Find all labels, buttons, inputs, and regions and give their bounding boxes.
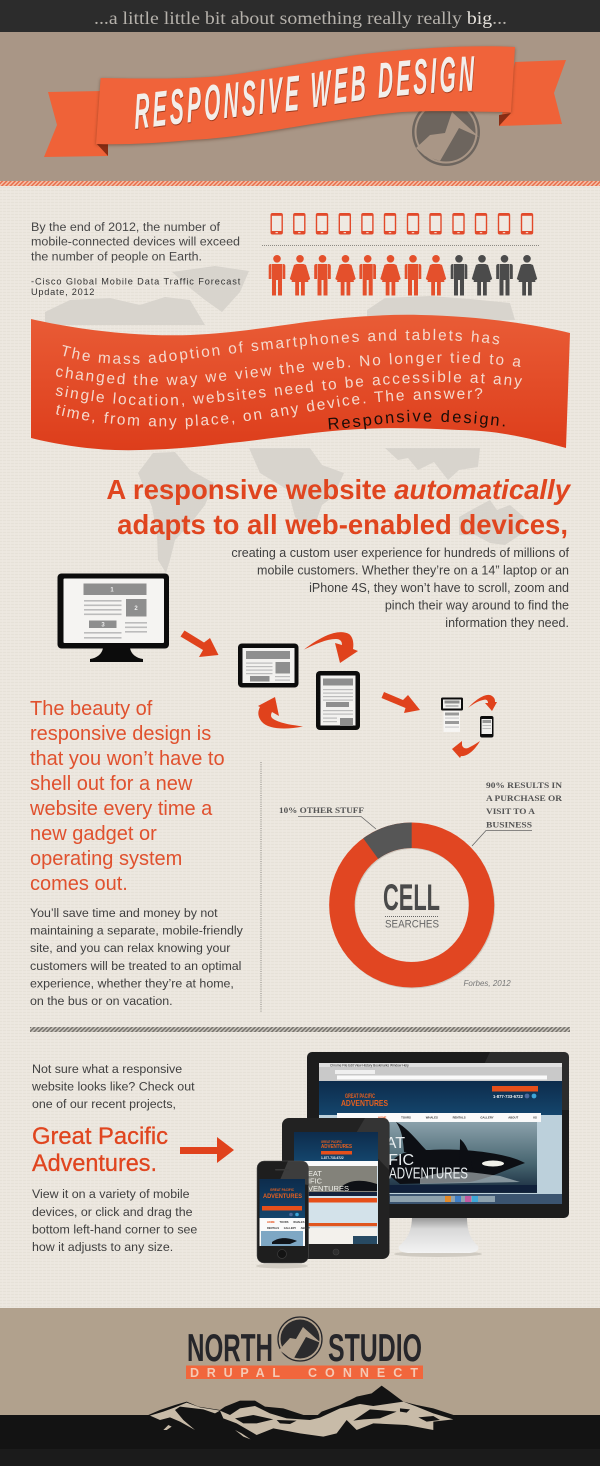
intro paragraph: pinch their way around to find the [385, 598, 569, 612]
banner quote: The mass adoption of smartphones and tablets has [62, 328, 500, 364]
drupal connect tag: DRUPAL [190, 1366, 280, 1380]
website header [319, 1081, 562, 1115]
label: 10% other stuff [279, 805, 376, 829]
banner quote: single location, websites need to be accessible at any [56, 370, 522, 407]
footer band [0, 1308, 600, 1466]
example project text: how it adjusts to any size. [32, 1240, 173, 1254]
donut centre label [383, 877, 440, 930]
example project text: devices, or click and drag the [32, 1205, 193, 1219]
example project text: one of our recent projects, [32, 1097, 176, 1111]
icon: small phone [480, 716, 494, 738]
device mockup: tablet [282, 1118, 390, 1259]
header band [0, 32, 600, 186]
arrow: small curved right [468, 695, 497, 711]
drupal connect tag [186, 1366, 423, 1380]
savings paragraph: site, and you can relax knowing your [30, 941, 230, 955]
website hero whale photo: ADVENTURES [389, 1166, 468, 1182]
device mockup: tablet: GREAT PACIFIC [321, 1139, 342, 1144]
savings paragraph: maintaining a separate, mobile-friendly [30, 924, 244, 938]
savings paragraph: experience, whether they’re at home, [30, 976, 234, 990]
intro paragraph [231, 546, 570, 630]
savings paragraph [30, 906, 244, 1008]
icon: logo circle [278, 1317, 322, 1361]
example project text [31, 1062, 197, 1254]
arrow: curved tablet rotate left [258, 697, 303, 728]
intro paragraph: iPhone 4S, they won’t have to scroll, zoom and [309, 581, 569, 595]
project name: Adventures. [32, 1150, 157, 1177]
device mockup: tablet: IFIC [308, 1176, 323, 1186]
website nav: HOME TOURS WHALES RENTALS GALLERY ABOUT US [378, 1116, 537, 1120]
beauty of responsive design callout: comes out. [30, 873, 128, 895]
arrow: small curved left [452, 741, 480, 758]
arrow: to device mockups [180, 1137, 234, 1163]
donut centre label: CELL [383, 877, 440, 918]
label: 90% results: 90% RESULTS IN [486, 780, 563, 790]
intro paragraph: creating a custom user experience for hundreds of millions of [231, 546, 570, 560]
top bar with tagline [0, 0, 600, 32]
banner quote: changed the way we view the web. No longer tied to a [56, 352, 520, 388]
device mockup: tablet: ADVENTURES [321, 1144, 352, 1150]
beauty of responsive design callout: responsive design is [30, 723, 211, 745]
north studio logo [186, 1317, 423, 1380]
label: 90% results: BUSINESS [486, 820, 532, 830]
icon: desktop monitor wireframe [58, 574, 169, 662]
intro paragraph: information they need. [445, 616, 569, 630]
beauty of responsive design callout: operating system [30, 848, 182, 870]
website hero whale photo: CIFIC [372, 1152, 414, 1169]
label: 90% results: A PURCHASE OR [486, 793, 563, 803]
heading: A responsive website automatically [106, 474, 572, 505]
intro paragraph: mobile customers. Whether they’re on a 14” laptop or an [257, 564, 569, 578]
label: 90% results [472, 780, 563, 846]
banner quote: time, from any place, on any device. The answer? [56, 388, 482, 430]
world map background [45, 266, 524, 573]
north studio logo: NORTH [187, 1327, 273, 1370]
browser chrome [319, 1063, 562, 1081]
icon: small phone layout stack [441, 698, 463, 732]
beauty of responsive design callout: The beauty of [30, 698, 153, 720]
beauty of responsive design callout: new gadget or [30, 823, 157, 845]
banner quote [56, 328, 522, 430]
device mockup: tablet: EAT [308, 1169, 322, 1178]
arrow: tablet to phone [382, 692, 420, 713]
project name: Great Pacific [32, 1123, 168, 1150]
icon: portrait tablet wireframe [316, 671, 360, 730]
icon: desktop monitor wireframe: 1 [110, 588, 114, 594]
example project text: bottom left-hand corner to see [32, 1222, 197, 1236]
arrow: curved tablet rotate right [304, 632, 358, 663]
cisco statistic text: mobile-connected devices will exceed [31, 234, 240, 248]
device mockup: phone: RENTALS GALLERY ABOUT [267, 1226, 310, 1230]
device mockup: tablet: VENTURES [308, 1184, 349, 1193]
cisco statistic text: Update, 2012 [31, 287, 95, 297]
device mockup: desktop [307, 1052, 569, 1257]
drupal connect tag: CONNECT [308, 1366, 418, 1380]
cisco statistic text: By the end of 2012, the number of [31, 220, 221, 234]
website hero whale photo [339, 1122, 537, 1193]
cisco statistic text [31, 220, 241, 297]
example project text: website looks like? Check out [31, 1080, 195, 1094]
tagline: ...a little little bit about something really really big... [94, 8, 507, 28]
savings paragraph: You’ll save time and money by not [30, 906, 218, 920]
icons: row of twelve people [269, 255, 537, 296]
website header: GREAT PACIFIC [345, 1094, 375, 1100]
panel: wavy orange banner [31, 314, 570, 450]
donut centre label: SEARCHES [385, 918, 439, 930]
icon: mountain logo stamp [412, 98, 480, 166]
device mockup: phone [256, 1161, 310, 1268]
icon: desktop monitor wireframe: 2 [134, 606, 138, 612]
label: 90% results: VISIT TO A [486, 806, 536, 816]
icons: row of twelve phones [270, 213, 533, 234]
website hero whale photo: EAT [375, 1135, 405, 1152]
savings paragraph: on the bus or on vacation. [30, 994, 173, 1008]
project name [32, 1123, 168, 1177]
cisco statistic text: the number of people on Earth. [31, 250, 202, 264]
icon: landscape tablet wireframe [238, 644, 298, 688]
device mockup: phone: HOME TOURS WHALES [267, 1220, 305, 1224]
beauty of responsive design callout [29, 698, 225, 895]
beauty of responsive design callout: shell out for a new [30, 773, 193, 795]
ribbon banner [44, 46, 566, 157]
beauty of responsive design callout: website every time a [29, 798, 213, 820]
device mockup: phone: ADVENTURES [263, 1193, 303, 1200]
source: forbes: Forbes, 2012 [464, 979, 511, 988]
arrow: desktop to tablet [180, 630, 218, 657]
browser chrome: Chrome File Edit View History Bookmarks Window Help [330, 1064, 409, 1068]
north studio logo: STUDIO [328, 1327, 422, 1370]
website header: 1-877-733-6722 [493, 1094, 523, 1100]
label: 10% other stuff: 10% OTHER STUFF [279, 805, 364, 815]
mountain range illustration [148, 1386, 457, 1439]
mac dock [319, 1194, 562, 1204]
icon: desktop monitor wireframe: 3 [101, 622, 105, 628]
savings paragraph: customers will be treated to an optimal [30, 959, 241, 973]
heading [106, 474, 572, 540]
example project text: Not sure what a responsive [32, 1062, 182, 1076]
heading: adapts to all web-enabled devices, [117, 509, 568, 540]
chart: cell searches donut [279, 780, 563, 988]
website nav [337, 1113, 541, 1122]
device mockup: tablet: 1-877-733-6722 [321, 1156, 344, 1160]
example project text: View it on a variety of mobile [32, 1187, 190, 1201]
cisco statistic text: -Cisco Global Mobile Data Traffic Forecast [31, 276, 241, 286]
device mockup: phone: GREAT PACIFIC [270, 1187, 294, 1192]
banner answer: Responsive design. [328, 410, 504, 430]
ribbon title: RESPONSIVE WEB DESIGN [135, 56, 475, 130]
website header: ADVENTURES [341, 1098, 388, 1108]
beauty of responsive design callout: that you won’t have to [30, 748, 225, 770]
